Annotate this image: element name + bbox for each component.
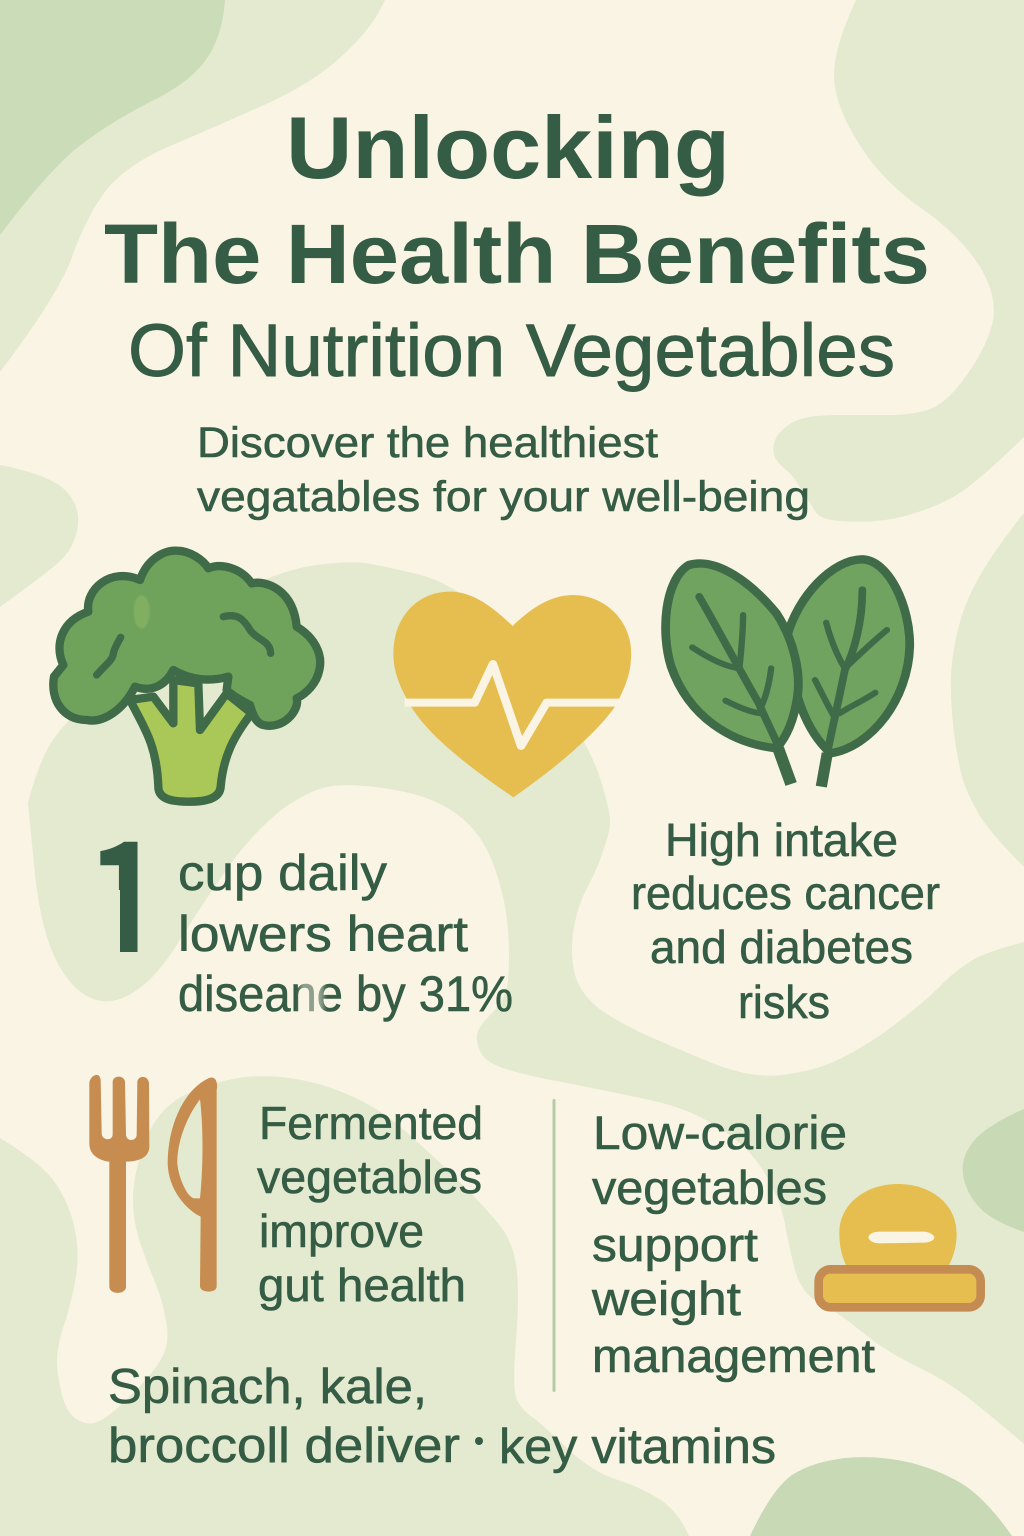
title line 1: Unlocking [286, 98, 730, 197]
text: high intake [631, 814, 940, 1028]
divider [552, 1099, 556, 1392]
title line 2: The Health Benefits [104, 207, 930, 301]
text: low-calorie vegetables: Low-calorie [593, 1106, 847, 1159]
text: high intake: risks [738, 976, 830, 1028]
text: fermented vegetables: vegetables [257, 1151, 482, 1203]
stat text: cup daily [178, 845, 387, 901]
text: key vitamins: key vitamins [499, 1420, 776, 1474]
icon: weight scale [819, 1184, 981, 1307]
icon: fork and knife [89, 1075, 217, 1293]
title [104, 98, 930, 392]
text: fermented vegetables: improve [259, 1205, 424, 1257]
title line 3: Of Nutrition Vegetables [128, 309, 895, 392]
text: low-calorie vegetables [591, 1106, 875, 1382]
icon: spinach leaves [666, 559, 910, 787]
text: low-calorie vegetables: support [592, 1218, 758, 1271]
icon: broccoli [53, 551, 320, 802]
text: low-calorie vegetables: vegetables [592, 1161, 827, 1214]
text: fermented vegetables [257, 1097, 483, 1311]
text: fermented vegetables: Fermented [259, 1097, 483, 1149]
subtitle: vegatables for your well-being [197, 473, 810, 521]
text: key vitamins: Spinach, kale, [108, 1360, 427, 1414]
text: key vitamins [108, 1360, 776, 1474]
text: fermented vegetables: gut health [258, 1259, 466, 1311]
fork [89, 1075, 149, 1293]
text: high intake: reduces cancer [631, 867, 940, 919]
text: low-calorie vegetables: management [592, 1329, 875, 1382]
text: high intake: High intake [665, 814, 898, 866]
icon: heart with pulse [393, 592, 631, 797]
text: high intake: and diabetes [650, 921, 913, 973]
stat text: lowers heart [178, 906, 468, 962]
text: key vitamins: broccoll deliver [108, 1419, 460, 1473]
stat text: diseane by 31% [178, 966, 513, 1022]
stat text [178, 845, 513, 1022]
knife [168, 1077, 217, 1292]
stat: one cup daily [100, 842, 512, 1022]
subtitle [197, 419, 810, 521]
subtitle: Discover the healthiest [197, 419, 658, 467]
big number: 1 [86, 774, 167, 996]
text: low-calorie vegetables: weight [591, 1272, 741, 1325]
